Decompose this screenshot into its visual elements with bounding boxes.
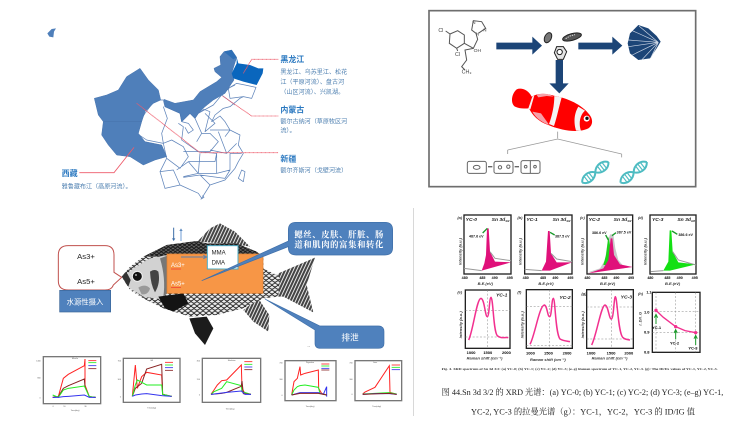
plot f: Raman YC-2: YC-2 <box>559 295 571 301</box>
callout: gill skin liver intestine muscle: 鳃丝、皮肤、肝脏、肠 <box>294 229 384 239</box>
arrow: As3+ to MMA <box>181 255 207 259</box>
plot e: Raman YC-1: 1500 <box>483 350 493 355</box>
icon: chemical structure: CH₃ <box>462 69 472 75</box>
chart 5: Liver <box>373 361 377 364</box>
plot g: Raman YC-3: YC-3 <box>621 294 632 300</box>
plot h: ID/IG values: 0.9 <box>644 330 650 335</box>
plot d: YC-3: 495 <box>692 276 698 280</box>
branching lines <box>508 132 622 157</box>
chart 1: 30 <box>84 406 87 408</box>
box: MMA DMA <box>207 246 238 269</box>
chart 2: Gill <box>150 360 154 362</box>
chart 2: 300 <box>118 379 122 381</box>
plot e: Raman YC-1: YC-1 <box>496 293 508 299</box>
plot g: Raman YC-3: 1000 <box>587 350 596 355</box>
icon: algae <box>543 31 582 59</box>
chart 3: 300 <box>197 361 201 363</box>
box: MMA DMA: DMA <box>212 260 225 266</box>
label: Inner Mongolia <box>280 105 347 135</box>
box: MMA DMA: MMA <box>212 251 226 257</box>
label: Heilongjiang <box>280 54 347 96</box>
plot e: Raman YC-1 <box>457 290 512 360</box>
map: province outlines <box>137 83 256 199</box>
plot h: ID/IG values <box>638 290 700 355</box>
plot g: Raman YC-3: 1500 <box>607 350 616 355</box>
illustration: fish <box>122 223 315 345</box>
plot h: ID/IG values: YC-3 <box>688 346 698 351</box>
plot f: Raman YC-2: (f) <box>517 290 522 295</box>
chart 3: Skeleton <box>228 359 236 362</box>
icon: chemical structure: N <box>472 20 475 25</box>
chart 3 <box>197 358 261 411</box>
box: orange enrichment region: As3+ <box>171 263 185 269</box>
plot f: Raman YC-2: Raman shift (cm⁻¹) <box>530 357 566 362</box>
callout: gill skin liver intestine muscle: 道和肌肉的富集和转化 <box>294 240 384 250</box>
plot b: YC-1: 490 <box>552 276 558 280</box>
chart 4: Digestive <box>306 361 315 364</box>
callout: waterborne arsenic: As5+ <box>77 277 95 286</box>
chart 5: 0 <box>352 394 354 396</box>
chart 4: 0 <box>282 395 284 397</box>
Chinese caption: YC-2, YC-3 的拉曼光谱（g）：YC-1，YC-2，YC-3 的 ID/IG 值 <box>471 406 696 417</box>
plot d: YC-3: 3/2 <box>691 219 695 223</box>
leader line: Heilongjiang <box>243 59 278 73</box>
arrow: algae to fish <box>549 60 569 93</box>
plot e: Raman YC-1: 2000 <box>502 350 512 355</box>
label: Xinjiang <box>280 153 347 174</box>
callout: waterborne arsenic: As3+ <box>77 252 95 261</box>
label: Xinjiang: 额尔齐斯河（戈壁河流） <box>280 166 347 174</box>
plot a: YC-0: Sn 3d <box>492 217 505 223</box>
panel frame <box>429 11 696 187</box>
plot b: YC-1: YC-1 <box>526 217 538 223</box>
callout: excretion <box>265 299 384 348</box>
chart 3: 150 <box>197 379 201 381</box>
map: Heilongjiang province highlighted <box>232 57 263 85</box>
chart 1: 0 <box>40 397 42 399</box>
label: Heilongjiang: 黑龙江 <box>280 54 304 64</box>
chart 2: 0 <box>120 397 122 399</box>
callout: waterborne arsenic <box>58 246 122 290</box>
panel: China map of arsenic rivers <box>47 28 347 199</box>
plot g: Raman YC-3: (g) <box>581 291 587 296</box>
plot b: YC-1: Intensity (a.u.) <box>518 237 523 265</box>
plot d: YC-3: 386.6 eV <box>678 233 694 237</box>
panel: arsenic concentration line charts <box>36 357 402 412</box>
plot c: YC-2: 387.5 eV <box>617 230 632 234</box>
plot a: YC-0: 485 <box>479 276 485 280</box>
chart 5 <box>349 361 402 408</box>
label: Tibet: 西藏 <box>62 168 78 178</box>
icon: clownfish <box>512 89 592 131</box>
icon: DNA left <box>580 159 611 186</box>
plot g: Raman YC-3: 2000 <box>624 350 634 355</box>
icon: chemical structure: Cl <box>438 28 443 34</box>
decorative dots label: .. <box>307 343 310 348</box>
chart 2: 700 <box>118 361 122 363</box>
map: Tibet province <box>102 122 167 165</box>
plot b: YC-1: 3/2 <box>566 219 571 223</box>
chart 1: 10 <box>63 406 66 408</box>
plot d: YC-3 <box>638 215 698 286</box>
plot a: YC-0: 495 <box>507 276 513 280</box>
label: Xinjiang: 新疆 <box>280 153 296 163</box>
panel divider line <box>412 208 414 416</box>
plot c: YC-2: YC-2 <box>589 217 600 223</box>
chart 1: Muscle <box>72 358 79 360</box>
label: Tibet <box>62 168 132 191</box>
icon: cell division <box>467 161 540 173</box>
plot c: YC-2 <box>579 215 634 286</box>
plot d: YC-3: Intensity (a.u.) <box>643 237 648 265</box>
plot d: YC-3: (d) <box>638 215 644 220</box>
plot d: YC-3: 485 <box>664 276 670 280</box>
plot c: YC-2: B.E.(eV) <box>600 281 616 286</box>
chart 3: 0 <box>199 395 201 397</box>
plot b: YC-1: 387.5 eV <box>555 234 570 238</box>
plot a: YC-0: 480 <box>462 276 468 280</box>
leader lines and labels <box>62 54 347 191</box>
plot b: YC-1 <box>517 215 573 286</box>
arrow: algae to shellfish <box>578 37 622 55</box>
leader line: Xinjiang <box>137 103 278 153</box>
chart 4 <box>279 361 336 408</box>
plot a: YC-0: 487.6 eV <box>469 234 484 238</box>
chart 3: Time(day) <box>226 409 235 411</box>
plot g: Raman YC-3: Raman shift (cm⁻¹) <box>592 355 628 360</box>
chart 1: 1400 <box>36 361 42 363</box>
panel: arsenic uptake in fish <box>58 222 393 348</box>
plot h: ID/IG values: 1.0 <box>644 309 650 314</box>
label: Tibet: 雅鲁藏布江（高原河流）。 <box>62 183 132 191</box>
label: waterborne uptake <box>60 290 111 312</box>
plot a: YC-0: B.E.(eV) <box>478 281 494 286</box>
plot e: Raman YC-1: 1000 <box>467 350 476 355</box>
plot c: YC-2: 480 <box>584 276 590 280</box>
chart 1 <box>36 357 101 412</box>
box: orange enrichment region: As5+ <box>171 281 185 287</box>
plot b: YC-1: 480 <box>523 276 529 280</box>
plot a: YC-0: Intensity (a.u.) <box>458 237 463 265</box>
plot c: YC-2: (c) <box>580 215 586 220</box>
plot d: YC-3: 490 <box>677 276 683 280</box>
label: Heilongjiang: 江（平原河流）、盘古河 <box>280 78 344 86</box>
plot h: ID/IG values: 1.1 <box>646 290 651 294</box>
plot b: YC-1: Sn 3d <box>553 217 566 223</box>
chart 2: Time(day) <box>147 407 156 409</box>
icon: DNA right <box>618 159 649 186</box>
icon: chemical structure: N <box>483 27 486 32</box>
map: Inner Mongolia province <box>164 50 237 122</box>
plot f: Raman YC-2: 1500 <box>544 350 554 355</box>
arrow: chemical to algae <box>496 37 542 55</box>
plot f: Raman YC-2: 2000 <box>563 350 572 355</box>
figure small caption: Fig. 4. XRD spectrum of Sn 3d 3/2: (a) YC-0; (b) YC-1; (c) YC-2; (d) YC-3; (e–g) Raman spectrum of YC-1, YC-2, YC-3. (g): The ID/IG values of YC-1, YC-2, YC-3. <box>442 367 718 371</box>
label: Inner Mongolia: 流）。 <box>280 127 296 135</box>
icon: chemical structure: Cl <box>455 52 460 58</box>
plot h: ID/IG values: 0.8 <box>644 350 650 355</box>
plot a: YC-0 <box>457 215 513 286</box>
label: Inner Mongolia: 额尔古纳河（草原牧区河 <box>280 117 347 125</box>
plot b: YC-1: 485 <box>540 276 546 280</box>
plot f: Raman YC-2 <box>517 290 572 362</box>
chart 4: Time(day) <box>306 406 315 408</box>
plot d: YC-3: Sn 3d <box>677 217 691 223</box>
chart 4: 300 <box>279 379 284 381</box>
map: western and northern blue provinces <box>94 50 263 165</box>
chart 5: 300 <box>349 379 354 381</box>
leader line: Tibet <box>79 147 134 173</box>
chart 1: 0 <box>53 406 55 408</box>
plot d: YC-3: B.E.(eV) <box>665 281 681 286</box>
icon: chemical structure: N <box>476 31 479 36</box>
plot b: YC-1: (b) <box>517 215 523 220</box>
plot h: ID/IG values: I_D/I_G <box>638 312 643 326</box>
plot c: YC-2: 490 <box>613 276 619 280</box>
box: orange enrichment region <box>167 254 263 293</box>
plot a: YC-0: YC-0 <box>466 217 477 223</box>
plot g: Raman YC-3: Intensity (a.u.) <box>580 311 585 338</box>
label: Heilongjiang: （山区河流）、兴凯湖。 <box>280 88 344 96</box>
map: Xinjiang province <box>94 68 161 122</box>
plot c: YC-2: 3/2 <box>627 219 632 223</box>
callout: excretion: 排泄 <box>341 332 359 343</box>
chart 5: Time(day) <box>372 406 381 408</box>
panel: fungicide transfer food chain <box>429 11 696 187</box>
arrow: efflux arrows <box>172 228 183 241</box>
plot h: ID/IG values: (h) <box>638 291 644 296</box>
plot g: Raman YC-3 <box>580 290 634 360</box>
leader line: Inner Mongolia <box>223 96 278 116</box>
panel: XRD and Raman spectra <box>442 215 723 417</box>
plot f: Raman YC-2: Intensity (a.u.) <box>519 311 524 338</box>
plot a: YC-0: 490 <box>492 276 498 280</box>
chart 5: 700 <box>349 363 354 365</box>
label: Heilongjiang: 黑龙江、乌苏里江、松花 <box>280 68 347 76</box>
plot e: Raman YC-1: Intensity (a.u.) <box>458 311 463 338</box>
plot b: YC-1: 495 <box>567 276 573 280</box>
plot a: YC-0: (a) <box>457 215 463 220</box>
icon: chemical structure <box>438 20 486 75</box>
label: waterborne uptake: 水源性摄入 <box>67 297 104 306</box>
chart 4: 700 <box>279 363 284 365</box>
plot b: YC-1: B.E.(eV) <box>538 281 554 286</box>
chart 2 <box>118 358 180 409</box>
plot a: YC-0: 3/2 <box>505 219 510 223</box>
chart 1: Time(day) <box>71 410 80 412</box>
callout: gill skin liver intestine muscle <box>202 222 393 281</box>
plot d: YC-3: YC-3 <box>652 217 664 223</box>
plot c: YC-2: 386.6 eV <box>592 231 607 235</box>
plot e: Raman YC-1: Raman shift (cm⁻¹) <box>467 355 503 360</box>
plot c: YC-2: 485 <box>601 276 607 280</box>
plot h: ID/IG values: YC-2 <box>670 340 680 345</box>
icon: chemical structure: OH <box>474 48 482 54</box>
icon: scallop shell <box>628 25 661 60</box>
icon: small map fragment <box>47 28 56 37</box>
overlays on fish <box>58 222 393 348</box>
plot c: YC-2: Sn 3d <box>614 217 627 223</box>
Chinese caption <box>442 387 723 417</box>
label: Inner Mongolia: 内蒙古 <box>280 105 304 115</box>
chart 1: 800 <box>37 377 42 379</box>
plot h: ID/IG values: YC-1 <box>652 325 662 330</box>
plot d: YC-3: 480 <box>647 276 653 280</box>
plot c: YC-2: Intensity (a.u.) <box>579 237 584 265</box>
plot f: Raman YC-2: 1000 <box>526 350 536 355</box>
Chinese caption: 图 44.Sn 3d 3/2 的 XRD 光谱：(a) YC-0; (b) YC-1; (c) YC-2; (d) YC-3; (e–g) YC-1, <box>442 387 723 397</box>
plot c: YC-2: 495 <box>628 276 634 280</box>
plot e: Raman YC-1: (e) <box>457 290 463 295</box>
